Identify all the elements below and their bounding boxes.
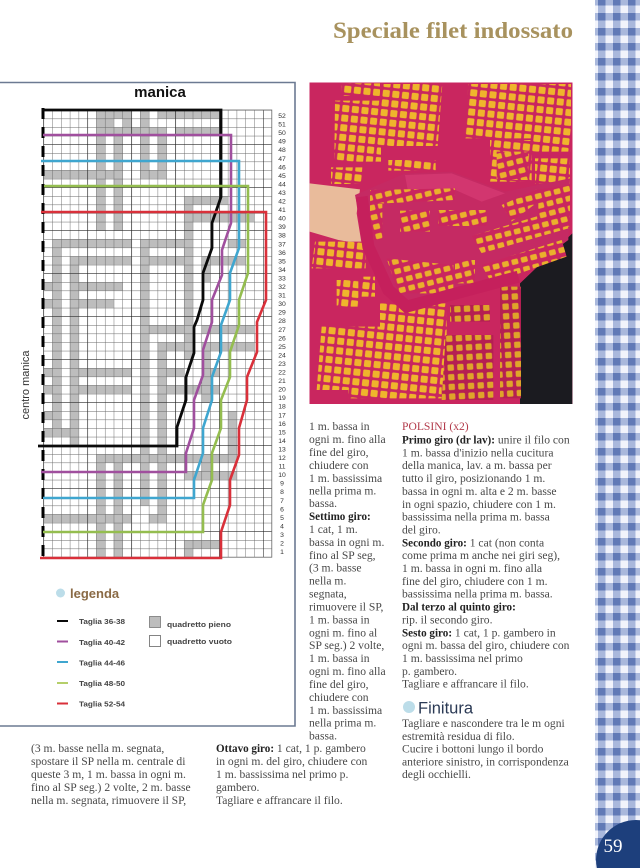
row numbers: 23: [278, 361, 286, 368]
row numbers: 43: [278, 190, 286, 197]
photo: sleeve detail: [310, 82, 572, 404]
row numbers: 44: [278, 181, 286, 188]
row numbers: 45: [278, 173, 286, 180]
row numbers: 37: [278, 241, 286, 248]
text block: settimo giro column: fino al SP seg,: [309, 549, 376, 562]
size outline 36-38: [38, 110, 221, 446]
label: centro manica: centro manica: [20, 350, 32, 420]
text block: finitura: Tagliare e nascondere tra le m ogni: [402, 717, 565, 730]
text block: settimo giro column: 1 m. bassa in: [309, 614, 370, 626]
sleeve cuff: [362, 197, 518, 307]
legend: size 36-38: Taglia 36-38: [79, 617, 125, 626]
text block: polsini: del giro.: [402, 524, 441, 536]
text block: bottom left column: spostare il SP nella m. centrale di: [31, 755, 185, 768]
heading: finitura: Finitura: [418, 700, 474, 718]
size outline 48-50: [43, 186, 248, 532]
text block: ottavo giro: gambero.: [216, 781, 260, 794]
row numbers: 4: [280, 523, 284, 530]
text block: settimo giro column: bassa.: [309, 497, 337, 510]
row numbers: 22: [278, 370, 286, 376]
text block: polsini: 1 m. bassissima nel primo: [402, 652, 523, 665]
text block: bottom left column: [31, 742, 191, 807]
legend: [56, 586, 233, 708]
page number badge: 59: [604, 836, 622, 857]
text block: settimo giro column: (3 m. basse: [309, 562, 361, 574]
row numbers: 48: [278, 147, 286, 154]
text block: finitura: [402, 717, 569, 781]
text block: finitura: degli occhielli.: [402, 768, 471, 781]
row numbers: 26: [278, 335, 286, 342]
text block: polsini: bassissima nella prima m. bassa.: [402, 588, 553, 601]
text block: polsini: bassa in ogni m. alta e 2 m. basse: [402, 485, 557, 498]
text block: polsini: [402, 420, 570, 691]
row numbers: 31: [278, 293, 286, 300]
row numbers: 14: [278, 438, 286, 445]
gingham side strip: [595, 0, 640, 868]
row numbers: 35: [278, 258, 286, 265]
text block: settimo giro column: nella prima m.: [309, 484, 376, 498]
text block: polsini: come prima m anche nei giri seg),: [402, 549, 560, 562]
text block: bottom left column: nella m. segnata, rimuovere il SP,: [31, 794, 186, 807]
legend: size 52-54: [57, 700, 126, 708]
title: Speciale filet indossato: [333, 18, 573, 44]
legend: filled square: [150, 616, 232, 629]
row numbers: 2: [280, 540, 284, 548]
text block: settimo giro column: SP seg.) 2 volte,: [309, 639, 384, 652]
row numbers: 27: [278, 327, 286, 334]
legend: size 40-42: Taglia 40-42: [79, 638, 125, 647]
text block: settimo giro column: 1 m. bassissima: [309, 472, 382, 485]
row numbers: [278, 113, 286, 556]
upper body mesh: [331, 83, 442, 184]
text block: ottavo giro: 1 m. bassissima nel primo p.: [216, 768, 348, 781]
text block: ottavo giro: in ogni m. del giro, chiudere con: [216, 755, 368, 768]
dark background: [520, 233, 572, 404]
legend: size 52-54: Taglia 52-54: [79, 700, 126, 708]
size outline 44-46: [41, 161, 239, 498]
row numbers: 24: [278, 352, 286, 359]
text block: settimo giro column: 1 m. bassa in: [309, 420, 370, 433]
row numbers: 18: [278, 404, 286, 411]
row numbers: 10: [278, 472, 286, 479]
text block: polsini: in ogni spazio, chiudere con 1 m.: [402, 498, 556, 511]
row numbers: 30: [278, 301, 286, 308]
text block: polsini: della manica, lav. a m. bassa per: [402, 459, 552, 472]
row numbers: 17: [278, 412, 286, 419]
text block: polsini: fine del giro, chiudere con 1 m.: [402, 575, 548, 588]
text block: settimo giro column: ogni m. fino al: [309, 626, 377, 640]
text block: settimo giro column: ogni m. fino alla: [309, 433, 386, 446]
row numbers: 49: [278, 139, 286, 146]
row numbers: 12: [278, 455, 286, 462]
text block: settimo giro column: chiudere con: [309, 691, 369, 704]
text block: settimo giro column: [309, 420, 386, 742]
row numbers: 36: [278, 250, 286, 257]
sleeve mesh: [370, 152, 570, 293]
row numbers: 46: [278, 164, 286, 171]
text block: settimo giro column: ogni m. fino alla: [309, 665, 386, 678]
legend: size 40-42: [57, 638, 125, 647]
row numbers: 38: [278, 233, 286, 240]
row numbers: 5: [280, 515, 284, 522]
row numbers: 52: [278, 113, 286, 120]
text block: bottom left column: fino al SP seg.) 2 volte, 2 m. basse: [31, 781, 191, 794]
row numbers: 7: [280, 498, 284, 505]
legend: empty square: quadretto vuoto: [167, 637, 233, 646]
text block: settimo giro column: chiudere con: [309, 459, 369, 472]
text block: polsini: Secondo giro: 1 cat (non conta: [402, 536, 544, 549]
text block: settimo giro column: bassa in ogni m.: [309, 536, 384, 549]
text block: settimo giro column: bassa.: [309, 730, 337, 742]
text block: bottom left column: (3 m. basse nella m. segnata,: [31, 742, 164, 755]
legend: size 48-50: [57, 679, 125, 688]
arm: [310, 183, 362, 244]
row numbers: 32: [278, 284, 286, 291]
row numbers: 8: [280, 489, 284, 496]
text block: polsini: 1 m. bassa in ogni m. fino alla: [402, 562, 542, 575]
chart heading: manica: manica: [134, 84, 187, 101]
row numbers: 47: [278, 156, 286, 163]
row numbers: 19: [278, 395, 286, 402]
row numbers: 42: [278, 198, 286, 206]
text block: settimo giro column: nella m.: [309, 574, 346, 588]
text block: polsini: bassissima nella prima m. bassa: [402, 511, 550, 524]
text block: polsini: ogni m. bassa del giro, chiudere con: [402, 639, 570, 652]
centre dashed edge: [42, 108, 44, 558]
row numbers: 29: [278, 310, 286, 317]
text block: finitura: estremità residua di filo.: [402, 730, 515, 743]
row numbers: 16: [278, 421, 286, 428]
text block: settimo giro column: 1 m. bassa in: [309, 652, 370, 665]
panel: sleeve chart frame: [0, 82, 295, 726]
legend: size 36-38: [57, 617, 125, 626]
legend heading: legenda: [70, 586, 120, 601]
row numbers: 1: [280, 549, 284, 556]
row numbers: 51: [278, 122, 286, 129]
filet chart grid: [44, 110, 272, 557]
lower body mesh: [312, 242, 447, 398]
row numbers: 15: [278, 429, 286, 436]
text block: settimo giro column: 1 cat, 1 m.: [309, 523, 358, 536]
text block: settimo giro column: 1 m. bassissima: [309, 704, 382, 717]
row numbers: 11: [278, 464, 286, 471]
polsini heading: POLSINI (x2): [402, 420, 469, 433]
text block: polsini: Sesto giro: 1 cat, 1 p. gambero in: [402, 626, 556, 639]
text block: settimo giro column: rimuovere il SP,: [309, 600, 383, 614]
text block: polsini: rip. il secondo giro.: [402, 613, 493, 626]
row numbers: 21: [278, 378, 286, 385]
text block: settimo giro column: fine del giro,: [309, 678, 369, 691]
legend: size 48-50: Taglia 48-50: [79, 679, 125, 688]
row numbers: 20: [278, 387, 286, 394]
row numbers: 50: [278, 130, 286, 137]
row numbers: 39: [278, 224, 286, 231]
row numbers: 25: [278, 344, 286, 351]
row numbers: 3: [280, 532, 284, 539]
size outline 52-54: [40, 212, 266, 558]
size outline 40-42: [41, 135, 231, 472]
text block: ottavo giro: Tagliare e affrancare il filo.: [216, 794, 343, 807]
filled squares: [44, 110, 254, 557]
row numbers: 9: [280, 481, 284, 488]
text block: polsini: 1 m. bassa d'inizio nella cucitura: [402, 446, 553, 459]
grid lines: [44, 110, 272, 557]
sleeve: [355, 172, 570, 312]
text block: settimo giro column: Settimo giro:: [309, 511, 371, 523]
text block: polsini: Tagliare e affrancare il filo.: [402, 678, 529, 691]
text block: polsini: p. gambero.: [402, 665, 457, 678]
legend: filled square: quadretto pieno: [167, 620, 232, 629]
row numbers: 13: [278, 446, 286, 454]
legend: empty square: [150, 636, 233, 646]
row numbers: 41: [278, 207, 286, 214]
legend: size 44-46: Taglia 44-46: [79, 658, 125, 668]
text block: settimo giro column: fine del giro,: [309, 446, 369, 459]
text block: settimo giro column: segnata,: [309, 588, 347, 600]
text block: polsini: Dal terzo al quinto giro:: [402, 602, 516, 614]
text block: polsini: Primo giro (dr lav): unire il filo con: [402, 434, 570, 446]
row numbers: 34: [278, 267, 286, 274]
text block: polsini: tutto il giro, posizionando 1 m.: [402, 472, 545, 485]
row numbers: 6: [280, 506, 284, 513]
text block: finitura: Cucire i bottoni lungo il bordo: [402, 743, 544, 756]
page number badge: [596, 820, 640, 868]
text block: bottom left column: queste 3 m, 1 m. bassa in ogni m.: [31, 768, 186, 781]
row numbers: 40: [278, 216, 286, 223]
legend: size 44-46: [57, 658, 125, 668]
row numbers: 28: [278, 318, 286, 325]
text block: ottavo giro: Ottavo giro: 1 cat, 1 p. gambero: [216, 742, 366, 755]
text block: finitura: anteriore sinistro, in corrispondenza: [402, 755, 569, 768]
text block: settimo giro column: nella prima m.: [309, 716, 376, 730]
text block: ottavo giro: [216, 742, 368, 807]
row numbers: 33: [278, 276, 286, 282]
